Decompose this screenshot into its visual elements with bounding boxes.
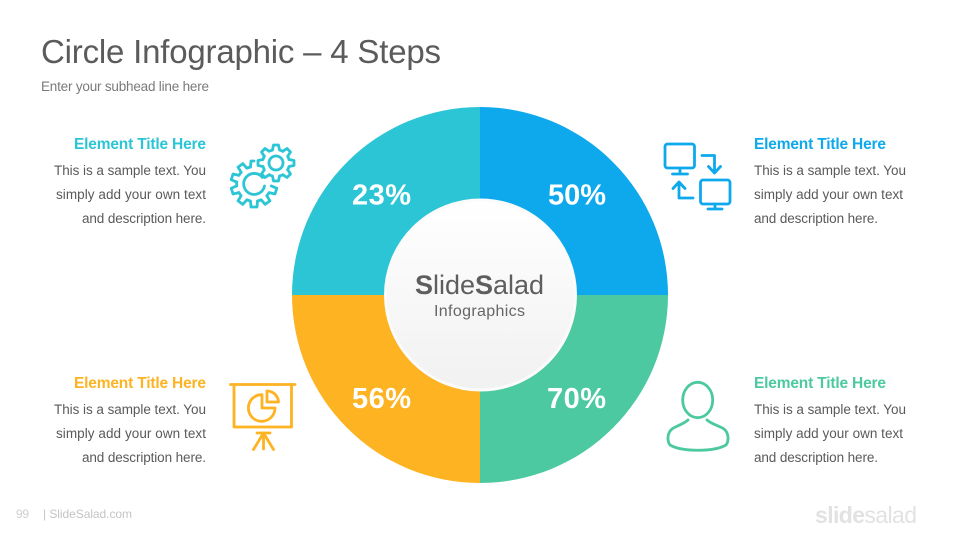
text block: bottom right	[754, 375, 906, 465]
value: 56%: 56%	[352, 383, 411, 415]
value: 70%: 70%	[547, 383, 606, 415]
icon: presentation board	[230, 384, 295, 450]
text block: bottom right: This is a sample text. You	[754, 402, 906, 417]
text block: bottom left: This is a sample text. You	[54, 402, 206, 417]
icon: person	[668, 382, 728, 450]
text block: top left: This is a sample text. You	[54, 163, 206, 178]
center caption: Infographics	[434, 303, 525, 320]
title: Circle Infographic – 4 Steps	[41, 33, 441, 70]
text block: bottom right: Element Title Here	[754, 375, 886, 392]
text block: top right: and description here.	[754, 211, 878, 226]
text block: top right: Element Title Here	[754, 136, 886, 153]
text block: bottom left: and description here.	[82, 450, 206, 465]
footer logo: slidesalad	[815, 502, 917, 528]
center brand: SlideSalad	[415, 270, 544, 300]
icon: monitors exchange	[665, 144, 730, 209]
segment: yellow 56%	[292, 295, 480, 483]
subhead: Enter your subhead line here	[41, 79, 209, 94]
text block: top left	[54, 136, 206, 226]
value: 23%: 23%	[352, 180, 411, 212]
footer site: | SlideSalad.com	[43, 507, 132, 521]
text block: bottom left: Element Title Here	[74, 375, 206, 392]
text block: top right	[754, 136, 906, 226]
center circle	[386, 200, 576, 390]
donut chart	[292, 107, 668, 483]
text block: bottom left: simply add your own text	[56, 426, 206, 441]
text block: top left: and description here.	[82, 211, 206, 226]
value: 50%: 50%	[548, 180, 606, 212]
text block: bottom right: and description here.	[754, 450, 878, 465]
segment: blue 50%	[480, 107, 668, 295]
text block: bottom right: simply add your own text	[754, 426, 903, 441]
text block: bottom left	[54, 375, 206, 465]
text block: top left: Element Title Here	[74, 136, 206, 153]
text block: top right: This is a sample text. You	[754, 163, 906, 178]
segment: green 70%	[480, 295, 668, 483]
icon: gears	[230, 145, 294, 207]
text block: top left: simply add your own text	[56, 187, 206, 202]
footer page number: 99	[16, 507, 29, 521]
segment: teal 23%	[292, 107, 480, 295]
text block: top right: simply add your own text	[754, 187, 903, 202]
